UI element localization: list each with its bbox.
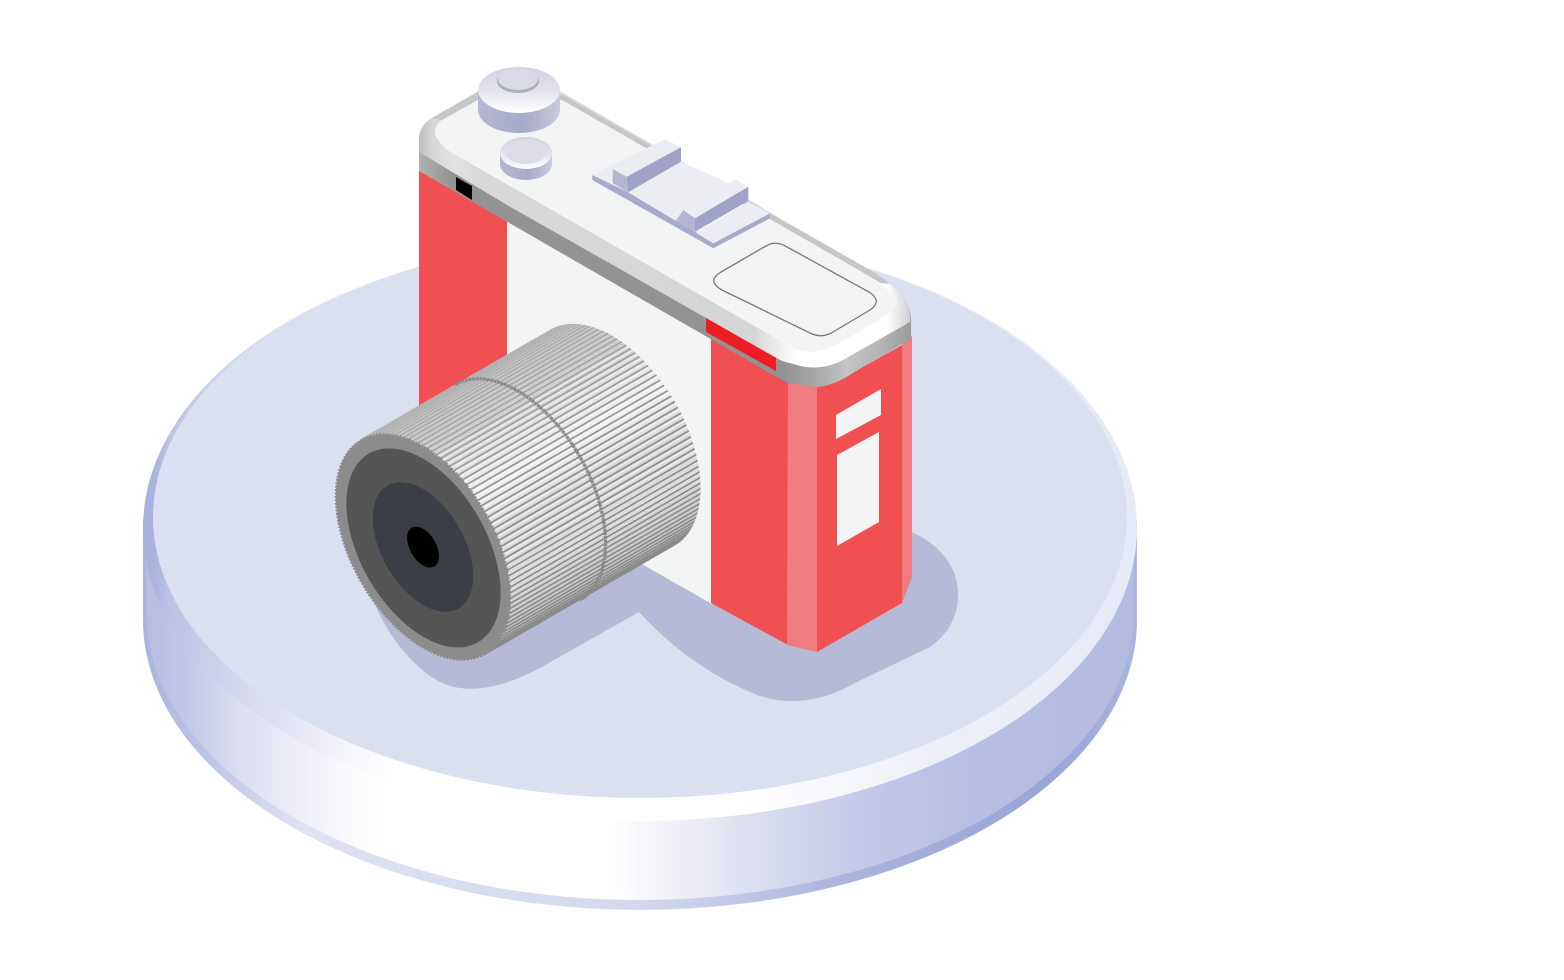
platform rim: [143, 520, 1137, 910]
barrel rib highlights: [438, 346, 696, 561]
large dial side: [478, 90, 560, 133]
shoe front plate: [697, 202, 770, 243]
red label: [706, 318, 776, 371]
top plate surface: [435, 100, 898, 352]
light red corner strip: [787, 380, 818, 652]
platform top surface: [153, 236, 1127, 798]
camera body: [419, 68, 912, 652]
top plate lower band: [419, 68, 911, 387]
small dial: [500, 137, 552, 180]
lens pupil: [400, 521, 446, 573]
lens barrel: [361, 324, 700, 655]
front red panel: [711, 338, 788, 645]
platform disc: [143, 235, 1137, 910]
camera drop shadow: [375, 450, 958, 701]
front rail top: [683, 179, 748, 218]
lens: [334, 324, 700, 661]
rear rail side: [627, 147, 681, 192]
top plate bevel: [419, 68, 910, 368]
shoe middle plate: [628, 162, 735, 221]
lens inner glass: [352, 465, 494, 629]
rear rail end: [613, 169, 628, 192]
lens front ring: [300, 405, 546, 689]
illustration: isometric camera on platform: [143, 67, 1137, 910]
black sensor: [456, 177, 472, 200]
back edge stripe: [432, 92, 890, 284]
light red right edge: [902, 336, 912, 603]
white centre panel: [507, 220, 712, 604]
barrel ribs: [361, 324, 700, 655]
shoe rear flange and rail top: [592, 139, 681, 183]
large dial upper knob side: [497, 69, 539, 93]
barrel groove: [455, 349, 642, 600]
hot shoe: [592, 139, 770, 248]
left red panel: [419, 168, 507, 410]
small dial rim: [500, 137, 552, 169]
lens dark annulus: [314, 422, 533, 674]
right red panel: [817, 345, 902, 652]
large dial top: [478, 67, 560, 113]
platform side wall: [146, 520, 1134, 900]
front rail end: [676, 210, 695, 232]
large dial: [478, 67, 560, 133]
large dial upper knob: [498, 68, 538, 90]
front rail side: [695, 187, 748, 232]
screen outline: [714, 243, 876, 336]
letter i logo: [836, 389, 881, 546]
small dial top: [505, 139, 547, 164]
platform bevel: [143, 235, 1137, 821]
shoe lower edge: [592, 175, 770, 248]
small dial side: [500, 153, 552, 180]
